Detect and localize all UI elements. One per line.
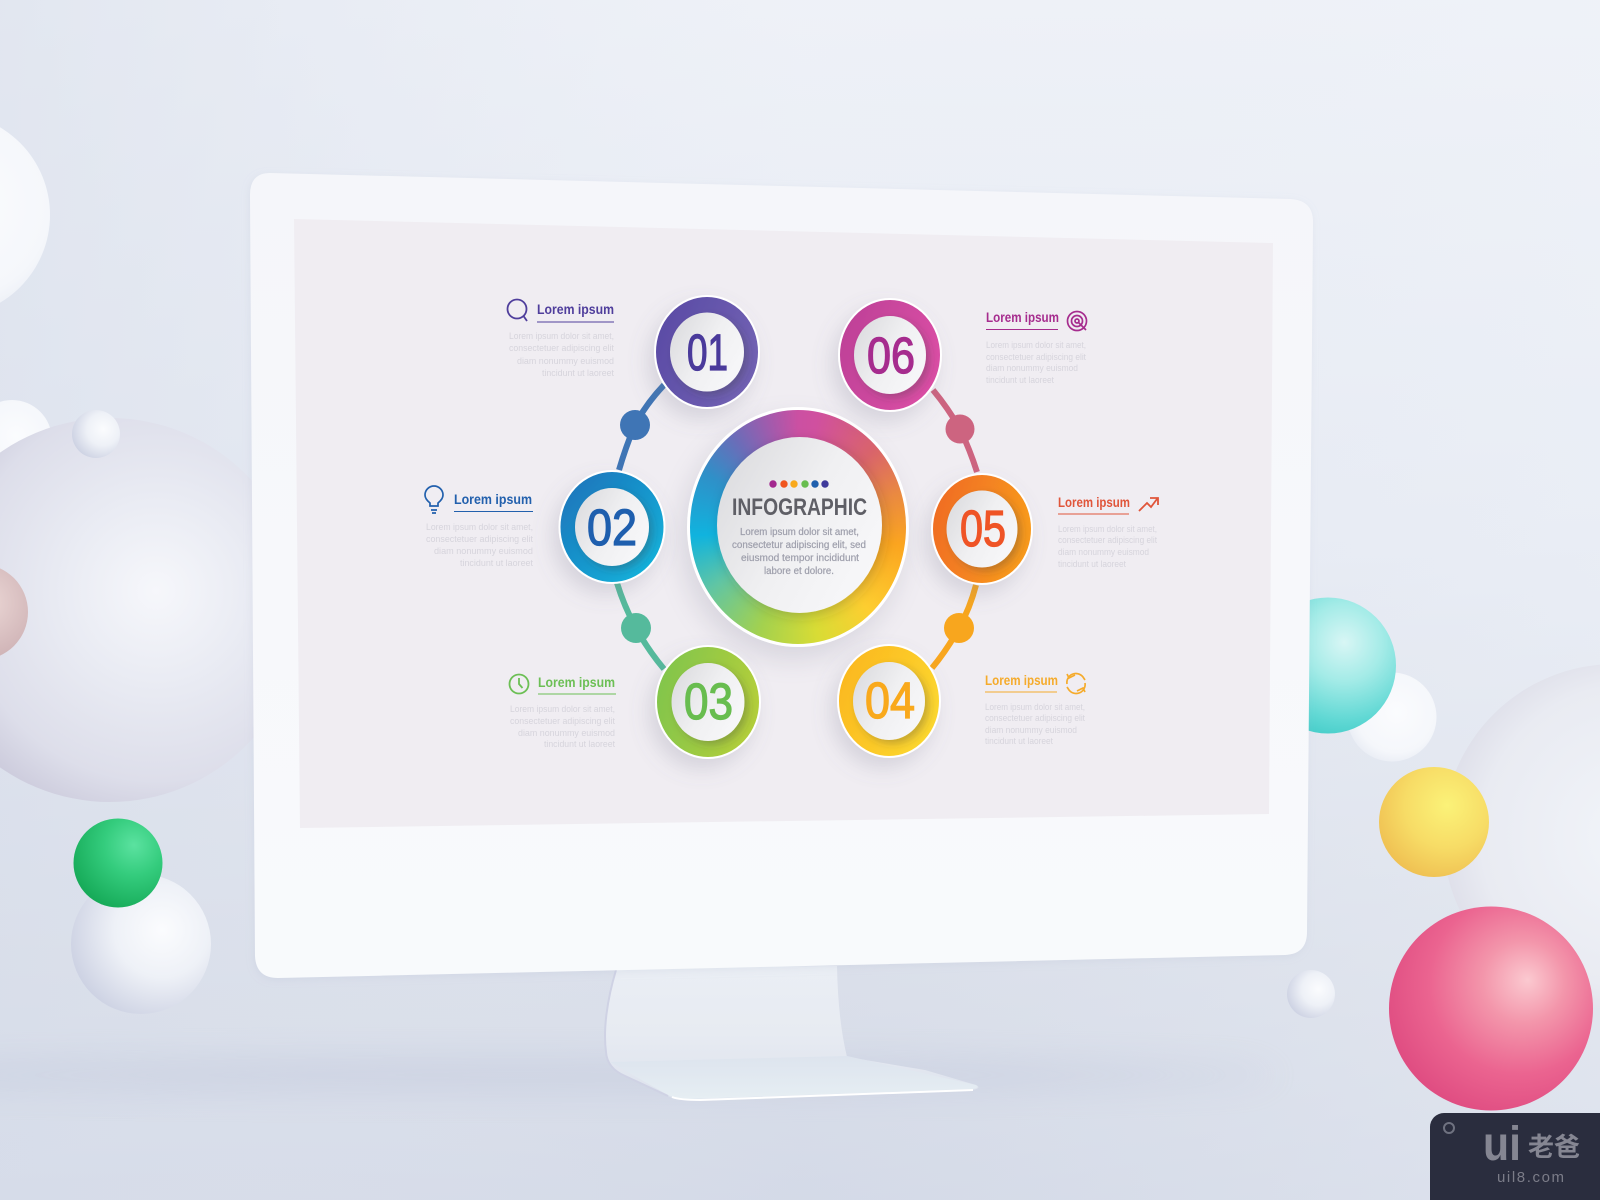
label block 03: diam nonummy euismod: [518, 728, 615, 739]
label block 04: diam nonummy euismod: [985, 725, 1077, 736]
label block 04: tincidunt ut laoreet: [985, 736, 1053, 747]
label block 05: Lorem ipsum dolor sit amet,: [1058, 524, 1157, 535]
label block 01: [508, 300, 614, 379]
label block 06: diam nonummy euismod: [986, 363, 1078, 374]
label block 05: diam nonummy euismod: [1058, 547, 1149, 558]
sphere: small white behind teal: [1348, 672, 1436, 762]
sphere: yellow: [1379, 767, 1489, 877]
label block 03: consectetuer adipiscing elit: [510, 716, 615, 727]
node 05: 05: [960, 500, 1006, 557]
connector: 05 to 06: [933, 390, 977, 472]
icon: magnifier: [508, 300, 527, 321]
label block 06: Lorem ipsum: [986, 309, 1059, 325]
sphere: small white behind lavender: [0, 400, 52, 480]
node 06: 06: [867, 327, 915, 384]
node 03: 03: [684, 673, 733, 730]
center disc with title: [717, 437, 882, 613]
label block 03: Lorem ipsum dolor sit amet,: [510, 704, 615, 715]
label block 05: tincidunt ut laoreet: [1058, 559, 1126, 570]
color dots: [769, 480, 829, 488]
connector: 04 to 05: [932, 585, 976, 668]
monitor screen: [294, 219, 1273, 828]
label block 06: tincidunt ut laoreet: [986, 375, 1054, 386]
label block 01: consectetuer adipiscing elit: [509, 343, 614, 354]
watermark badge: uil8.com: [1497, 1169, 1564, 1186]
sphere: teal: [1260, 598, 1396, 734]
watermark badge: 老爸: [1528, 1132, 1580, 1162]
connector: 02 to 03: [617, 583, 664, 669]
monitor body: [250, 173, 1313, 978]
label block 03: tincidunt ut laoreet: [544, 739, 615, 750]
label block 04: Lorem ipsum dolor sit amet,: [985, 702, 1085, 713]
icon: light bulb: [425, 486, 443, 513]
node 04: 04: [865, 672, 915, 729]
icon: refresh arrows: [1067, 673, 1085, 694]
node 04: [838, 645, 940, 757]
label block 01: Lorem ipsum: [537, 301, 614, 317]
monitor stand: [605, 966, 978, 1101]
label block 02: diam nonummy euismod: [434, 546, 533, 557]
icon: trending arrow: [1139, 498, 1158, 511]
center description: Lorem ipsum dolor sit amet,: [740, 527, 859, 538]
node 06: [839, 299, 941, 411]
sphere: pink: [1389, 906, 1593, 1110]
label block 04: [985, 672, 1085, 747]
label block 02: [425, 486, 533, 569]
node 05: [932, 474, 1032, 584]
sphere: large lavender: [0, 418, 302, 802]
label block 01: tincidunt ut laoreet: [542, 368, 614, 379]
watermark badge: [1430, 1113, 1600, 1200]
label block 06: [986, 309, 1086, 386]
sphere: top left white: [0, 113, 50, 317]
label block 05: consectetuer adipiscing elit: [1058, 535, 1157, 546]
label block 02: Lorem ipsum: [454, 491, 532, 507]
node 02: [560, 471, 664, 583]
label block 05: Lorem ipsum: [1058, 494, 1130, 510]
sphere: beige at left edge: [0, 564, 28, 660]
label block 01: Lorem ipsum dolor sit amet,: [509, 331, 614, 342]
label block 06: consectetuer adipiscing elit: [986, 352, 1086, 363]
label block 03: [510, 674, 616, 750]
node 01: [655, 296, 759, 408]
central rainbow ring: [687, 407, 909, 647]
node 01: 01: [687, 324, 728, 381]
node 03: [656, 646, 760, 758]
label block 06: Lorem ipsum dolor sit amet,: [986, 340, 1086, 351]
icon: target: [1068, 312, 1086, 330]
sphere: small pearl below monitor: [1287, 970, 1335, 1018]
label block 04: consectetuer adipiscing elit: [985, 713, 1085, 724]
label block 01: diam nonummy euismod: [517, 356, 614, 367]
icon: clock: [510, 674, 528, 694]
connector: 01 to 02: [619, 385, 664, 470]
watermark badge: ui: [1483, 1118, 1521, 1171]
center description: labore et dolore.: [764, 566, 834, 577]
label block 02: tincidunt ut laoreet: [460, 558, 533, 569]
center description: eiusmod tempor incididunt: [741, 553, 859, 564]
sphere: green: [74, 818, 162, 908]
label block 03: Lorem ipsum: [538, 674, 615, 690]
center description: [732, 527, 866, 577]
sphere: white under green: [71, 874, 211, 1014]
label block 04: Lorem ipsum: [985, 672, 1058, 688]
sphere: big white at right: [1443, 664, 1600, 1008]
sphere: small pearl on lavender: [72, 410, 120, 458]
center title: INFOGRAPHIC: [732, 494, 867, 521]
label block 02: consectetuer adipiscing elit: [426, 534, 533, 545]
floor shadow: [0, 1062, 1280, 1088]
label block 02: Lorem ipsum dolor sit amet,: [426, 522, 533, 533]
node 02: 02: [587, 499, 637, 556]
label block 05: [1058, 494, 1158, 570]
center description: consectetur adipiscing elit, sed: [732, 540, 866, 551]
